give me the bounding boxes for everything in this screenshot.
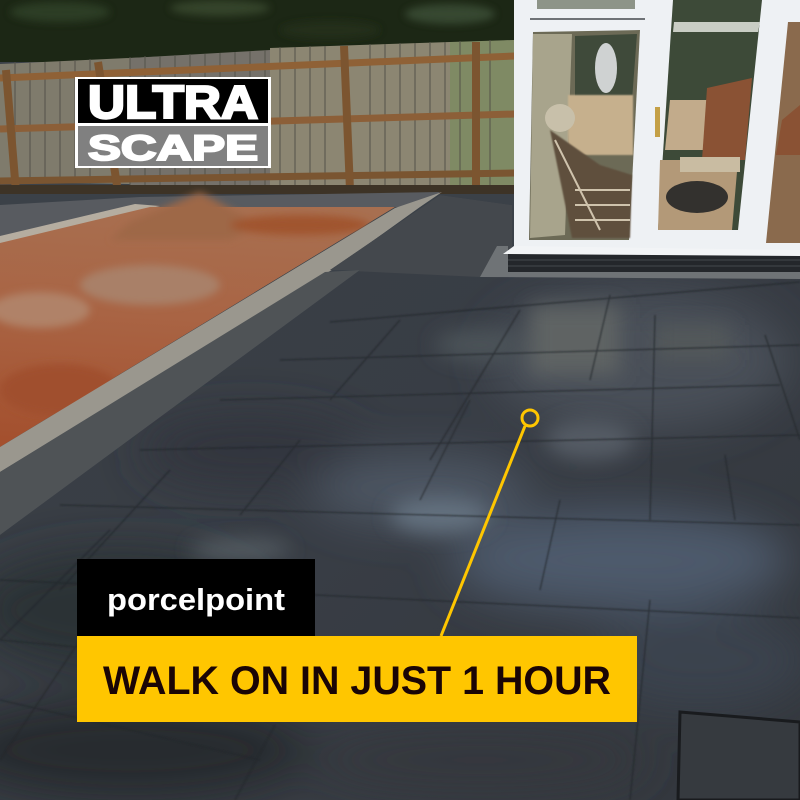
logo text: SCAPE: SCAPE — [88, 129, 258, 168]
centre door glass — [658, 0, 762, 230]
label: product name: porcelpoint — [107, 582, 285, 617]
brick base — [508, 254, 800, 273]
left window — [529, 30, 640, 240]
door handle — [655, 107, 660, 137]
logo text: ULTRA: ULTRA — [88, 76, 258, 128]
label: product name — [77, 559, 315, 636]
paving — [0, 196, 800, 800]
banner: walk on in just 1 hour — [77, 636, 637, 722]
grey path beyond soil — [0, 192, 440, 238]
sill shadow — [530, 18, 645, 20]
logo: Ultrascape — [75, 76, 271, 168]
inspection cover — [678, 712, 800, 800]
trees behind the fence — [0, 0, 520, 62]
reflections — [0, 290, 800, 800]
right glass — [766, 22, 800, 243]
conservatory — [480, 0, 800, 279]
shaded kerb — [0, 270, 360, 535]
banner: walk on in just 1 hour: WALK ON IN JUST 1 HOUR — [103, 659, 611, 703]
stone sill — [480, 246, 800, 279]
pointer line and ring — [441, 410, 538, 636]
wooden fence — [0, 40, 515, 194]
pale edging beside path — [0, 204, 160, 244]
stone kerb — [0, 192, 442, 472]
far paving — [330, 195, 512, 277]
upper window — [537, 0, 635, 9]
soil bed — [0, 192, 395, 447]
tile joints — [0, 282, 800, 800]
white frame — [514, 0, 800, 252]
